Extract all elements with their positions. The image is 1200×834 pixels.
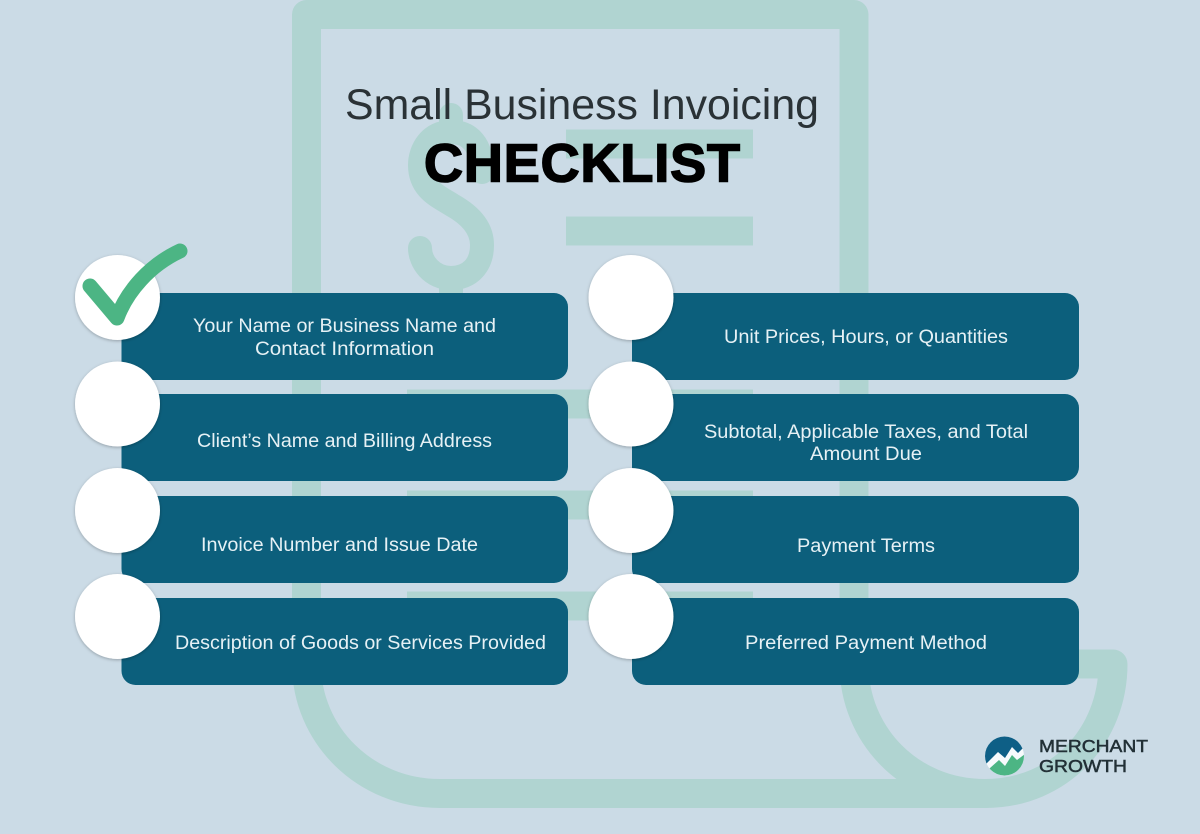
panel: card 6 bbox=[632, 394, 1079, 481]
panel: card 7 bbox=[632, 496, 1079, 583]
logo mark bbox=[984, 736, 1025, 777]
panel: card 8 bbox=[632, 598, 1079, 685]
panel: card 1 bbox=[122, 293, 568, 380]
panel: card 1: Contact Information bbox=[255, 339, 434, 360]
panel: card 3 bbox=[122, 496, 568, 583]
logo wordmark bbox=[1039, 736, 1148, 776]
panel: card 6: Subtotal, Applicable Taxes, and Total bbox=[704, 422, 1028, 443]
checkbox circles bbox=[75, 255, 674, 659]
panel: card 7: Payment Terms bbox=[797, 536, 935, 557]
icon: green check mark bbox=[90, 251, 180, 318]
panel: card 5 bbox=[632, 293, 1079, 380]
logo wordmark: GROWTH bbox=[1039, 756, 1127, 776]
panel: card 4: Description of Goods or Services Provided bbox=[175, 633, 546, 654]
panel: card 2 bbox=[122, 394, 568, 481]
panel: card 5: Unit Prices, Hours, or Quantities bbox=[724, 327, 1008, 348]
panel: card 1: Your Name or Business Name and bbox=[193, 316, 496, 337]
logo wordmark: MERCHANT bbox=[1039, 736, 1148, 756]
title line 2: CHECKLIST bbox=[424, 134, 740, 194]
logo: Merchant Growth bbox=[984, 736, 1148, 777]
panel: card 6: Amount Due bbox=[810, 444, 922, 465]
panel: card 4 bbox=[122, 598, 568, 685]
background invoice icon bbox=[306, 14, 1113, 794]
panel: card 2: Client’s Name and Billing Address bbox=[197, 431, 492, 452]
title bbox=[345, 81, 819, 194]
panel: card 3: Invoice Number and Issue Date bbox=[201, 535, 478, 556]
title line 1: Small Business Invoicing bbox=[345, 81, 819, 129]
panel: card 8: Preferred Payment Method bbox=[745, 633, 987, 654]
